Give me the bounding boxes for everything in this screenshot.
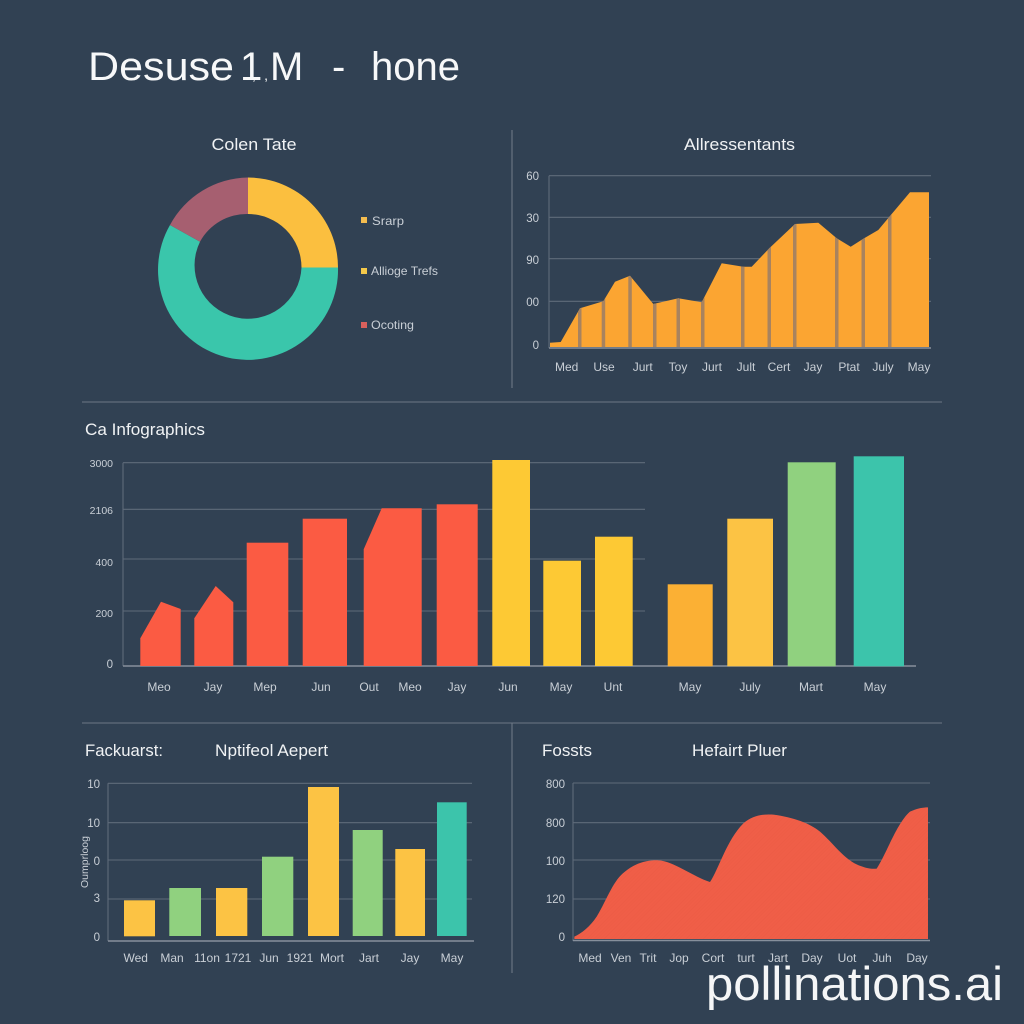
heading: small bar chart left: Fackuarst: — [85, 741, 163, 760]
x axis labels: Use — [593, 360, 615, 374]
panel: large bar chart — [85, 420, 916, 694]
y axis labels: 200 — [95, 608, 113, 620]
bars — [124, 787, 467, 936]
x axis labels: 1921 — [287, 951, 314, 965]
x axis labels — [555, 360, 930, 374]
title: ,, — [252, 67, 272, 83]
title: M — [270, 45, 303, 89]
panel: small bar chart — [79, 741, 474, 965]
x axis labels: Jun — [259, 951, 279, 965]
y axis labels: 60 — [526, 171, 539, 183]
y axis labels: 0 — [107, 659, 113, 671]
legend: Allioge Trefs — [371, 264, 438, 278]
heading: red area right: Hefairt Pluer — [692, 741, 787, 760]
heading: large bar chart: Ca Infographics — [85, 420, 205, 439]
x axis labels: Jay — [401, 951, 419, 965]
y axis labels: 0 — [94, 856, 100, 868]
y axis labels: 800 — [546, 779, 565, 791]
legend: Srarp — [372, 214, 404, 228]
x axis labels — [123, 951, 463, 965]
x axis labels: Day — [906, 951, 928, 965]
x axis labels: Trit — [640, 951, 657, 965]
light yellow bar — [727, 519, 773, 666]
x axis labels: Juh — [872, 951, 892, 965]
heading: donut: Colen Tate — [212, 135, 296, 154]
heading: small bar chart right: Nptifeol Aepert — [215, 741, 328, 760]
y axis labels: 90 — [526, 255, 539, 267]
x axis labels: Jult — [737, 360, 756, 374]
y axis labels: 3 — [94, 893, 100, 905]
x axis labels — [147, 680, 886, 694]
y axis labels — [546, 779, 565, 944]
green bar — [788, 462, 836, 666]
x axis labels — [578, 951, 928, 965]
x axis labels: Jay — [448, 680, 466, 694]
red bars — [140, 504, 478, 666]
x axis labels: 1721 — [225, 951, 252, 965]
y axis labels — [526, 171, 539, 352]
x axis labels: May — [441, 951, 463, 965]
x axis labels: Cert — [768, 360, 791, 374]
x axis labels: May — [864, 680, 886, 694]
legend: Ocoting — [371, 318, 414, 332]
x axis labels: Day — [801, 951, 823, 965]
x axis labels: Meo — [147, 680, 171, 694]
title: - — [332, 45, 345, 89]
orange bar — [668, 584, 713, 666]
red hatched area — [574, 807, 928, 939]
x axis labels: Mart — [799, 680, 824, 694]
title: 1 — [240, 45, 262, 89]
x axis labels: Wed — [123, 951, 148, 965]
x axis labels: Jay — [804, 360, 822, 374]
x axis labels: May — [550, 680, 572, 694]
y axis labels: 100 — [546, 856, 565, 868]
x axis labels: Jop — [669, 951, 689, 965]
x axis labels: Jurt — [702, 360, 723, 374]
y axis labels: 800 — [546, 818, 565, 830]
y axis labels — [90, 458, 113, 671]
x axis labels: May — [908, 360, 930, 374]
x axis labels: Ptat — [838, 360, 860, 374]
heading: area chart: Allressentants — [684, 135, 795, 154]
y axis labels: 10 — [87, 779, 100, 791]
y axis labels: 2106 — [90, 505, 113, 517]
x axis labels: Mort — [320, 951, 345, 965]
panel: donut chart — [158, 135, 438, 360]
x axis labels: Out — [359, 680, 379, 694]
y axis labels: 400 — [95, 557, 113, 569]
x axis labels: Jun — [311, 680, 331, 694]
title: hone — [371, 45, 460, 89]
x axis labels: Man — [160, 951, 184, 965]
heading: red area left: Fossts — [542, 741, 592, 760]
x axis labels: Med — [555, 360, 578, 374]
y axis labels: 00 — [526, 297, 539, 309]
donut chart — [158, 178, 338, 360]
x axis labels: Meo — [398, 680, 422, 694]
x axis labels: Uot — [838, 951, 857, 965]
y axis labels: 10 — [87, 818, 100, 830]
title — [88, 45, 460, 89]
x axis labels: 11on — [194, 951, 220, 965]
yellow bars — [492, 460, 633, 666]
x axis labels: Toy — [669, 360, 687, 374]
y axis labels: 0 — [94, 932, 100, 944]
x axis labels: Jay — [204, 680, 222, 694]
x axis labels: Ven — [611, 951, 631, 965]
watermark: pollinations.ai — [706, 957, 1003, 1010]
x axis labels: Med — [578, 951, 602, 965]
y axis labels: 0 — [559, 932, 565, 944]
x axis labels: Jun — [498, 680, 518, 694]
x axis labels: turt — [737, 951, 755, 965]
title: Desuse — [88, 45, 234, 89]
y axis labels: 3000 — [90, 458, 113, 470]
y axis labels — [87, 779, 100, 944]
rotated axis title: Oumprloog — [79, 836, 91, 888]
x axis labels: Mep — [253, 680, 277, 694]
panel: area chart top right — [526, 135, 931, 374]
x axis labels: Cort — [702, 951, 725, 965]
legend — [361, 214, 438, 332]
x axis labels: Jurt — [633, 360, 653, 374]
x axis labels: Jart — [359, 951, 380, 965]
y axis labels: 0 — [533, 340, 539, 352]
x axis labels: Unt — [604, 680, 623, 694]
x axis labels: July — [739, 680, 761, 694]
panel: red area chart — [542, 741, 930, 965]
y axis labels: 120 — [546, 894, 565, 906]
x axis labels: May — [679, 680, 701, 694]
teal bar — [854, 456, 904, 666]
orange stepped area — [550, 192, 929, 347]
x axis labels: July — [872, 360, 894, 374]
x axis labels: Jart — [768, 951, 789, 965]
y axis labels: 30 — [526, 213, 539, 225]
